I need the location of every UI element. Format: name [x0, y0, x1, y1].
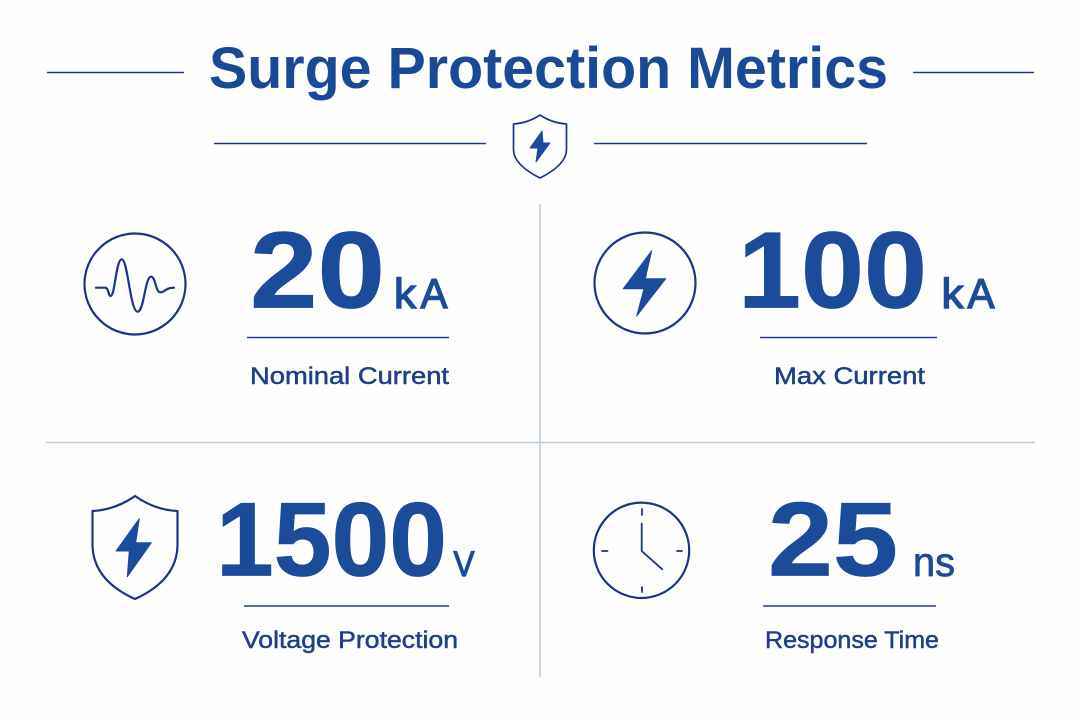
panel: response time [594, 482, 955, 654]
label: response time: Response Time [765, 627, 939, 654]
title: Surge Protection Metrics [209, 36, 888, 101]
metric value: 20 kA: k [394, 270, 417, 317]
icon: bolt in circle [594, 232, 696, 334]
metric value: 25 ns: ns [913, 539, 955, 585]
icon: header shield with bolt [514, 115, 566, 178]
metric value: 100 kA: k [942, 270, 965, 317]
label: nominal current: Nominal Current [250, 363, 449, 390]
icon: waveform in circle [84, 234, 186, 334]
panel: voltage protection [92, 482, 475, 654]
metric value: 1500 V: 1500 [216, 482, 447, 598]
label: voltage protection: Voltage Protection [242, 627, 458, 654]
metric value: 20 kA: 20 [250, 210, 385, 332]
metric value: 100 kA: 100 [738, 210, 927, 332]
icon: clock [594, 503, 689, 598]
metric value: 25 ns: 25 [768, 482, 898, 598]
icon: shield with bolt [92, 496, 178, 599]
panel: max current [594, 210, 994, 390]
panel: nominal current [84, 210, 449, 390]
metric value: 20 kA [250, 210, 448, 332]
metric value: 100 kA: A [968, 270, 994, 317]
metric value: 20 kA: A [420, 270, 448, 317]
metric value: 1500 V: V [454, 545, 475, 584]
label: max current: Max Current [774, 363, 925, 390]
metric value: 25 ns [768, 482, 955, 598]
